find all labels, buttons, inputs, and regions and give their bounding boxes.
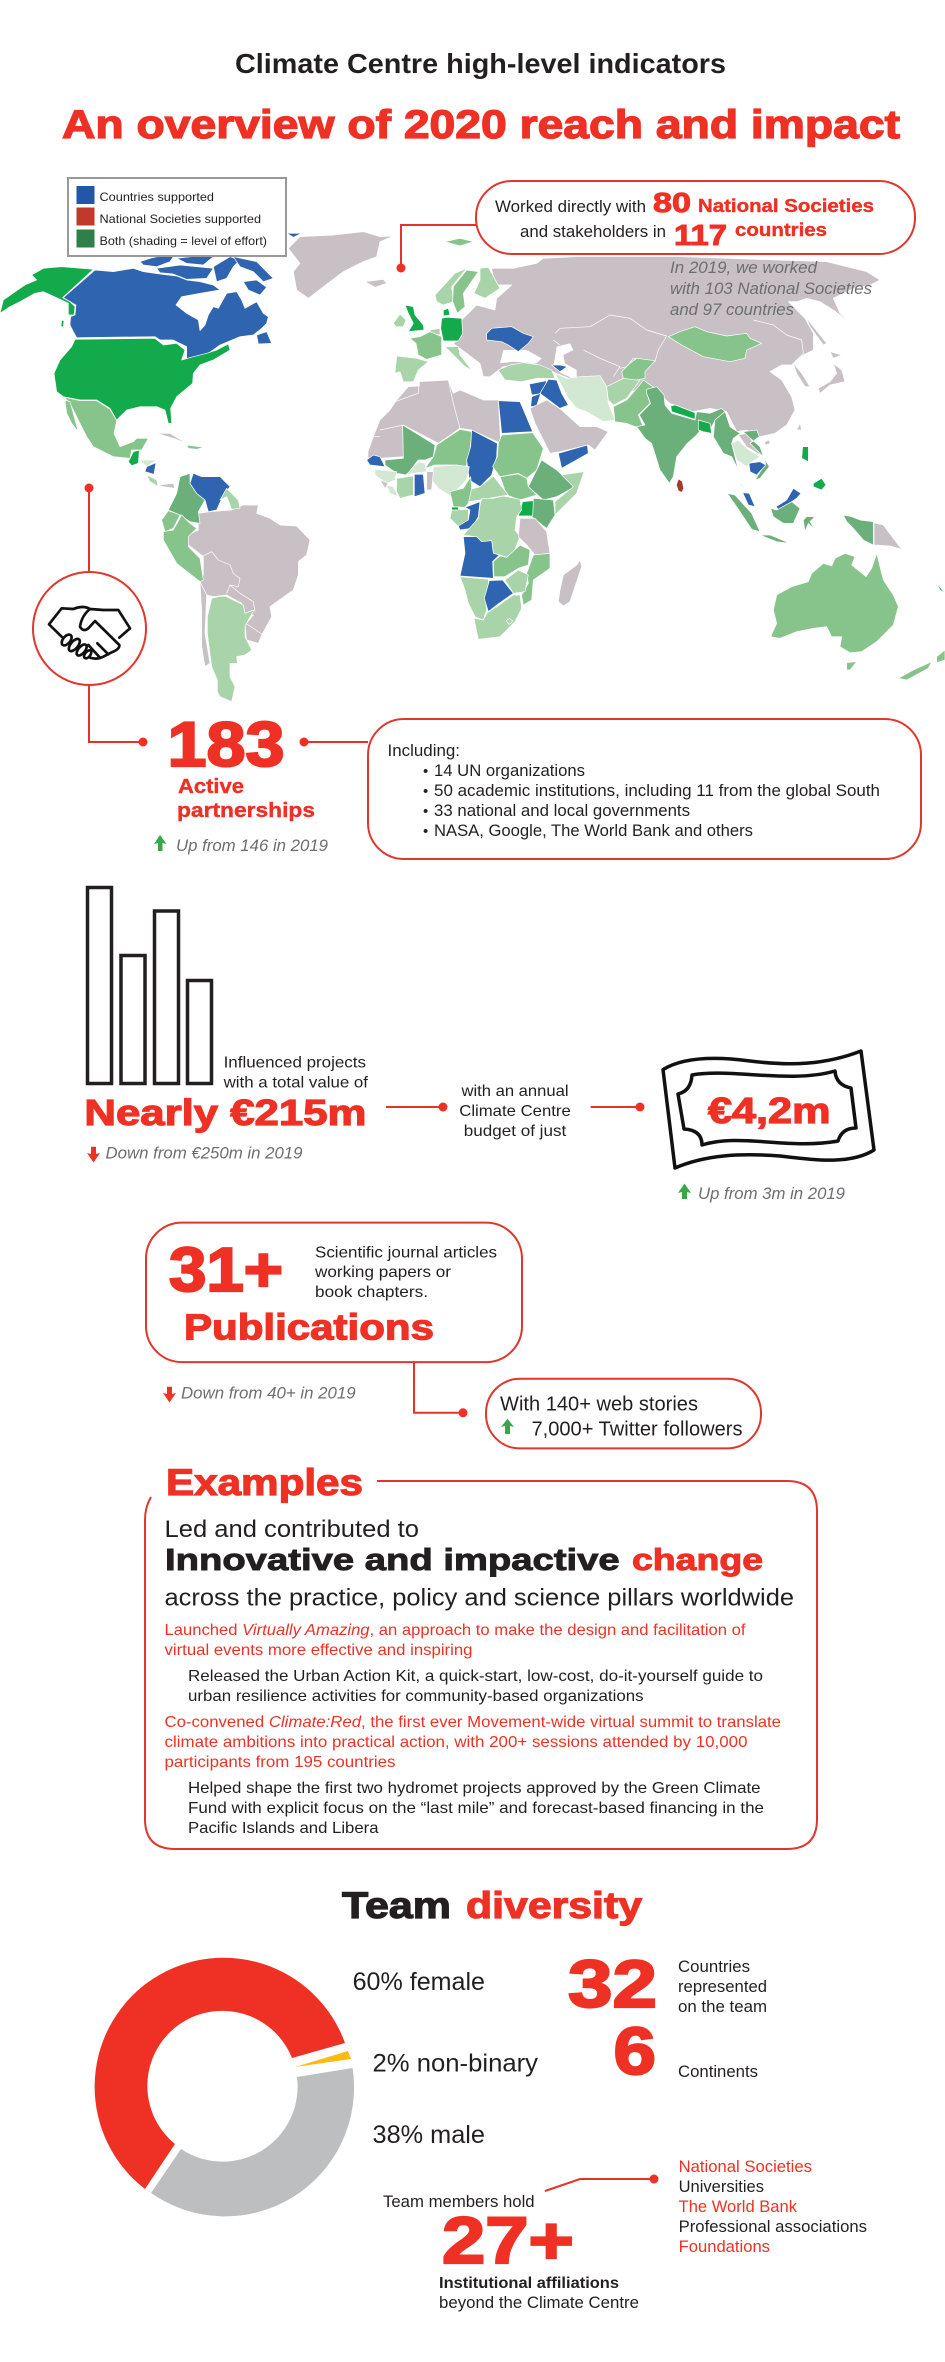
panel: partnership breakdown: Including:: [388, 742, 460, 760]
trend: up from 146: Up from 146 in 2019: [176, 836, 329, 855]
map: Eurasia and northern Africa base: [368, 238, 880, 528]
title: Climate Centre high-level indicators: [235, 48, 726, 79]
list: affiliation types: The World Bank: [679, 2198, 798, 2216]
heading: team diversity: diversity: [466, 1885, 642, 1926]
text: influenced projects: with a total value of: [223, 1074, 369, 1091]
panel: publications: book chapters.: [315, 1284, 428, 1301]
callout: National Societies reach: and stakeholders in: [520, 223, 666, 241]
stat: 27+ affiliations: [383, 2193, 639, 2312]
chart labels: 38% male: [372, 2121, 485, 2149]
panel: publications: [146, 1223, 522, 1362]
text: annual budget: [459, 1083, 571, 1140]
stat: 183 active partnerships: Active: [178, 776, 244, 798]
text: annual budget: Climate Centre: [459, 1103, 571, 1120]
panel: examples: [145, 1462, 817, 1849]
map: Colombia, Venezuela, Ecuador, Peru: [162, 473, 240, 582]
stat: 27+ affiliations: Team members hold: [383, 2193, 535, 2211]
example: hydromet projects: Pacific Islands and Libera: [188, 1820, 379, 1837]
map: North and Central America, northern South America: [0, 232, 393, 488]
heading: examples: Examples: [166, 1462, 363, 1503]
list: affiliation types: Universities: [679, 2178, 764, 2196]
stat: 6 continents: [614, 2014, 758, 2089]
callout: National Societies reach: countries: [735, 220, 827, 240]
connector: partnerships line: [84, 484, 148, 746]
panel: partnership breakdown: 50 academic institutions, including 11 from the global South: [434, 782, 880, 800]
stat: 183 active partnerships: [168, 710, 315, 822]
example: Virtually Amazing: virtual events more effective and inspiring: [164, 1642, 472, 1659]
heading: innovative and impactive change: Innovative and impactive: [165, 1542, 620, 1577]
note: 2019 comparison: In 2019, we worked: [670, 259, 818, 277]
icon: banknote with 4,2m: €4,2m: [708, 1090, 830, 1131]
example: hydromet projects: Fund with explicit focus on the “last mile” and forecast-based financing in the: [188, 1800, 764, 1817]
example: Climate:Red: [164, 1714, 781, 1771]
icon: banknote with 4,2m: [663, 1051, 874, 1168]
callout: National Societies reach: Worked directly with: [495, 198, 646, 216]
list: affiliation types: National Societies: [679, 2158, 812, 2176]
arrow: budget to banknote: [591, 1102, 644, 1112]
stat: 32 countries: Countries: [678, 1958, 750, 1976]
icon: bar chart: [88, 888, 212, 1084]
panel: web stories and followers: 7,000+ Twitter followers: [532, 1418, 742, 1440]
panel: partnership breakdown: •: [423, 823, 428, 840]
stat: 183 active partnerships: partnerships: [177, 800, 315, 822]
stat: 27+ affiliations: beyond the Climate Centre: [439, 2294, 639, 2312]
list: affiliation types: [679, 2158, 867, 2256]
text: led and contributed to: Led and contributed to: [164, 1516, 419, 1543]
example: Urban Action Kit: Released the Urban Action Kit, a quick-start, low-cost, do-it-yourself guide to: [188, 1668, 763, 1685]
trend: down from 40+: Down from 40+ in 2019: [181, 1384, 356, 1402]
callout: National Societies reach: 117: [674, 220, 727, 252]
legend: Both (shading = level of effort): [100, 234, 267, 248]
example: Virtually Amazing: [164, 1622, 746, 1659]
text: annual budget: with an annual: [460, 1083, 568, 1100]
callout: National Societies reach: 80: [653, 187, 691, 218]
stat: nearly 215m: Nearly €215m: [84, 1092, 366, 1133]
panel: publications: Publications: [184, 1307, 434, 1348]
panel: publications: working papers or: [314, 1264, 452, 1281]
connector: partnerships to list: [300, 738, 368, 746]
trend: up from 3m: Up from 3m in 2019: [698, 1185, 845, 1203]
map: Indonesia, Australia and New Zealand: [727, 493, 945, 680]
map: Asia detail: [607, 358, 826, 509]
panel: partnership breakdown: •: [423, 803, 428, 820]
stat: 32 countries: represented: [678, 1978, 767, 1996]
heading: team diversity: [342, 1885, 642, 1926]
panel: web stories and followers: With 140+ web stories: [500, 1393, 698, 1415]
stat: 6 continents: Continents: [678, 2063, 758, 2081]
panel: publications: 31+: [169, 1236, 283, 1305]
callout: National Societies reach: [476, 181, 915, 254]
donut chart: gender: [95, 1958, 354, 2216]
stat: 32 countries: [568, 1947, 767, 2022]
arrow: projects to budget: [386, 1102, 448, 1112]
world map: [0, 232, 945, 702]
stat: 183 active partnerships: 183: [168, 710, 284, 780]
note: 2019 comparison: and 97 countries: [670, 301, 794, 319]
stat: 27+ affiliations: 27+: [442, 2203, 574, 2277]
example: Urban Action Kit: urban resilience activities for community-based organizations: [188, 1688, 644, 1705]
chart labels: 2% non-binary: [372, 2050, 539, 2078]
panel: web stories and followers: [486, 1379, 761, 1448]
main heading: An overview of 2020 reach and impact: [62, 103, 900, 147]
panel: partnership breakdown: NASA, Google, The World Bank and others: [434, 822, 753, 840]
list: affiliation types: Professional associations: [679, 2218, 867, 2236]
stat: 32 countries: 32: [568, 1947, 657, 2022]
stat: 6 continents: 6: [614, 2014, 656, 2089]
callout: National Societies reach: National Societies: [698, 196, 874, 216]
map: South America: [187, 505, 310, 702]
trend: down from 250m: Down from €250m in 2019: [106, 1144, 302, 1162]
legend: Countries supported: [100, 190, 214, 204]
panel: partnership breakdown: 14 UN organizations: [434, 762, 585, 780]
map: southern Africa and Madagascar: [367, 455, 582, 639]
icon: handshake in circle: [33, 572, 146, 685]
panel: partnership breakdown: •: [423, 763, 428, 780]
example: Urban Action Kit: [188, 1668, 763, 1705]
heading: innovative and impactive change: change: [632, 1542, 763, 1577]
example: Virtually Amazing: Launched Virtually Amazing , an approach to make the design and facilitation of: [164, 1622, 746, 1639]
example: hydromet projects: [188, 1780, 764, 1837]
text: annual budget: budget of just: [464, 1123, 567, 1140]
note: 2019 comparison: with 103 National Societies: [670, 280, 872, 298]
connector: publications to web stories: [414, 1362, 468, 1417]
stat: 32 countries: on the team: [678, 1998, 767, 2016]
callout connector: reach: [396, 225, 476, 272]
example: Climate:Red: participants from 195 countries: [164, 1754, 396, 1771]
heading: team diversity: Team: [342, 1885, 451, 1926]
list: affiliation types: Foundations: [679, 2238, 770, 2256]
heading: innovative and impactive change: [165, 1542, 763, 1577]
stat: 27+ affiliations: Institutional affiliations: [439, 2275, 619, 2292]
panel: partnership breakdown: [368, 719, 921, 859]
legend: National Societies supported: [100, 212, 261, 226]
chart labels: 60% female: [353, 1968, 485, 1996]
connector: affiliations: [545, 2174, 658, 2191]
text: influenced projects: Influenced projects: [224, 1055, 366, 1072]
panel: publications: Scientific journal articles: [315, 1244, 497, 1261]
chart labels: [353, 1968, 539, 2149]
text: across pillars: across the practice, policy and science pillars worldwide: [164, 1585, 794, 1612]
example: Climate:Red: climate ambitions into practical action, with 200+ sessions attended by 10,000: [164, 1734, 748, 1751]
text: influenced projects: [223, 1055, 369, 1091]
panel: partnership breakdown: 33 national and local governments: [434, 802, 690, 820]
note: 2019 comparison: [670, 259, 872, 319]
example: Climate:Red: Co-convened Climate:Red , the first ever Movement-wide virtual summit to translate: [164, 1714, 781, 1731]
legend: [68, 178, 286, 256]
panel: partnership breakdown: •: [423, 783, 428, 800]
example: hydromet projects: Helped shape the first two hydromet projects approved by the Green Climate: [188, 1780, 761, 1797]
